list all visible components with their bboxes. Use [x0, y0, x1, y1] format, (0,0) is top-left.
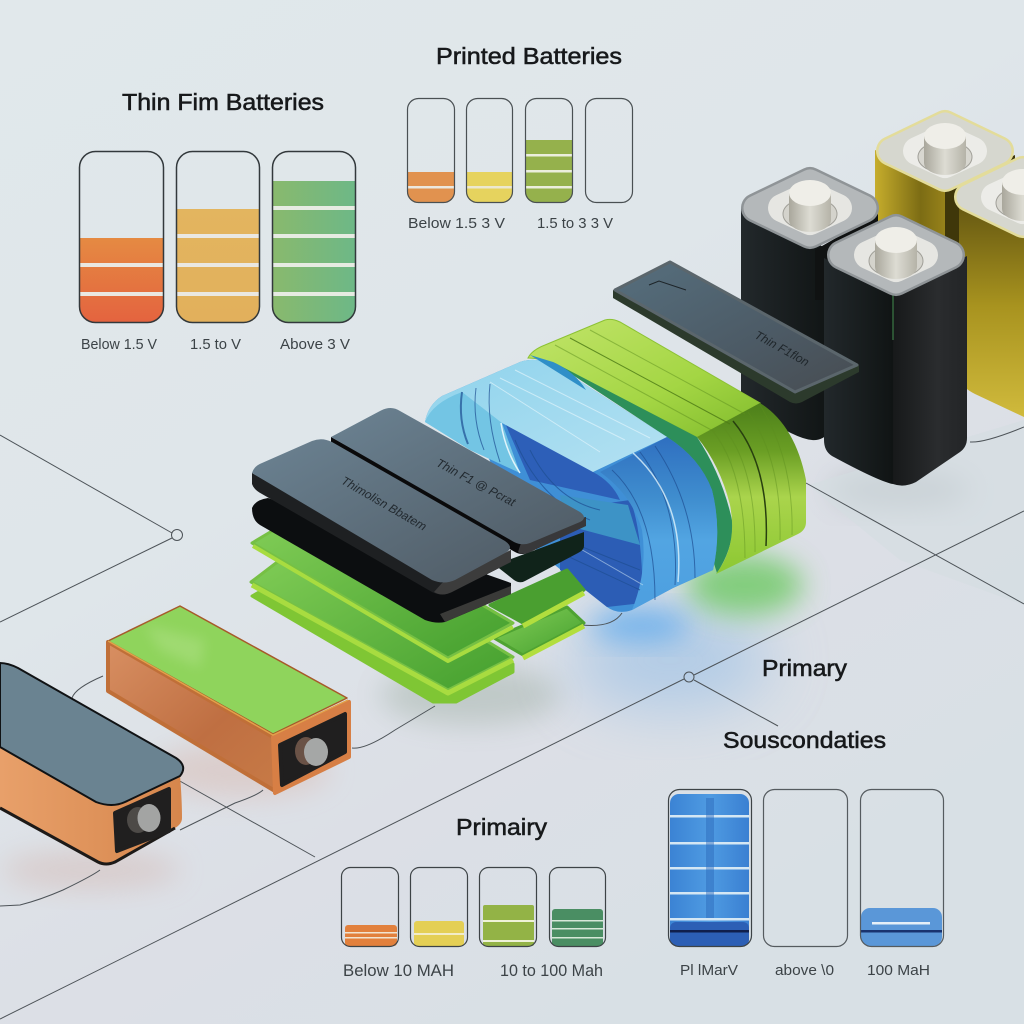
axis labels: Below 1.5 3 V: [408, 215, 505, 232]
axis labels: [408, 215, 613, 232]
axis labels: 1.5 to 3 3 V: [537, 215, 613, 232]
icon: slate cell terminal: [127, 804, 160, 833]
axis labels: 1.5 to V: [190, 336, 241, 353]
thin film slab: upper right: [613, 262, 859, 404]
slab engraved text: Thimolisn Bbatem: [339, 473, 429, 534]
rear plate upper: [490, 570, 584, 626]
heading: Primairy: [456, 814, 548, 840]
gauge: full blue: [668, 790, 752, 946]
heading: Printed Batteries: [436, 43, 622, 69]
green coil: [528, 319, 806, 574]
slab engraved text: Thin F1 @ Pcrat: [434, 456, 518, 510]
slab engraved text: Thin F1flon: [752, 328, 812, 369]
gauge: yellow: [410, 868, 468, 946]
panel: souscondaties capacity: [668, 727, 944, 979]
soft floor glows: [0, 420, 1024, 890]
base plate: [252, 586, 513, 702]
gauge: low blue: [860, 790, 944, 946]
gauge: empty: [586, 98, 632, 202]
gauge: empty: [764, 790, 848, 946]
panel: thin film batteries: [79, 89, 356, 353]
axis labels: Pl lMarV: [680, 962, 738, 979]
icon: copper cell terminal: [295, 737, 328, 766]
gauge: green: [525, 98, 573, 203]
battery: copper cell with green top: [108, 606, 349, 793]
battery: copper cell with slate top: [0, 663, 183, 864]
panel: printed batteries: [407, 43, 632, 232]
axis labels: Below 1.5 V: [81, 336, 157, 353]
gauge: dark green: [550, 868, 606, 946]
middle plate: [251, 540, 513, 693]
gauge: below 1.5 V: [79, 152, 164, 323]
heading: Thin Fim Batteries: [122, 89, 324, 115]
rear plate lower: [494, 607, 584, 658]
battery: yellow rear: [875, 123, 1015, 330]
gauge: 1.5 to 3 V: [176, 152, 260, 323]
axis labels: [343, 962, 603, 980]
thin film slab: front centre: [252, 439, 511, 594]
stacked green plates: [251, 510, 584, 702]
battery: black front: [824, 227, 967, 486]
gauge: orange: [342, 868, 398, 946]
black slabs lower: [252, 498, 584, 623]
gauge: yellow: [466, 98, 513, 203]
axis labels: [680, 962, 930, 979]
battery: yellow right: [959, 169, 1024, 417]
gauge: above 3 V: [272, 152, 356, 323]
translucent blue coil: [425, 355, 717, 612]
battery: black rear: [741, 180, 878, 440]
axis labels: 100 MaH: [867, 962, 930, 979]
connector lines: [0, 427, 1024, 1019]
axis labels: 10 to 100 Mah: [500, 962, 603, 980]
top plate: [252, 510, 513, 661]
axis labels: Above 3 V: [280, 336, 350, 353]
axis labels: Below 10 MAH: [343, 962, 454, 980]
heading: Souscondaties: [723, 727, 886, 753]
axis labels: [81, 336, 350, 353]
gauge: lime: [480, 868, 536, 946]
axis labels: above \0: [775, 962, 834, 979]
heading: primary: Primary: [762, 655, 848, 681]
thin film slab: rear centre: [331, 408, 586, 554]
gauge: orange: [407, 98, 455, 203]
panel: primairy capacity: [342, 814, 606, 980]
